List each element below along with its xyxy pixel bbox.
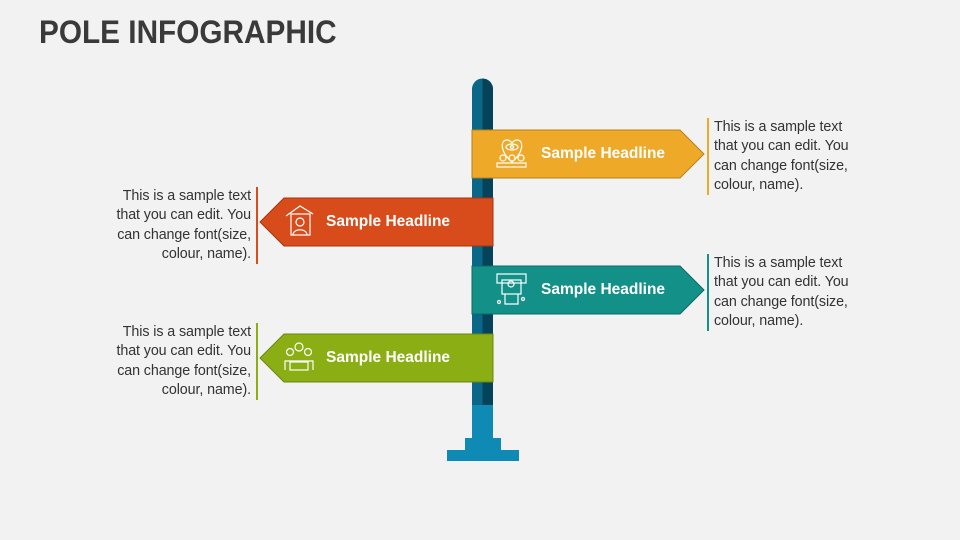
text: green: colour, name). — [162, 382, 251, 398]
title: POLE INFOGRAPHIC — [39, 14, 337, 50]
text: orange: that you can edit. You — [714, 138, 849, 154]
text: red: This is a sample text — [123, 188, 251, 204]
text: orange — [707, 118, 849, 195]
text: red: that you can edit. You — [116, 207, 251, 223]
sign: red: Sample Headline — [326, 213, 450, 230]
text: red: can change font(size, — [117, 227, 251, 243]
text: green — [116, 323, 258, 400]
text: red: colour, name). — [162, 246, 251, 262]
text: teal: This is a sample text — [714, 255, 842, 271]
text: orange: This is a sample text — [714, 119, 842, 135]
text: green: that you can edit. You — [116, 343, 251, 359]
sign: teal: Sample Headline — [541, 281, 665, 298]
text: teal: that you can edit. You — [714, 274, 849, 290]
sign: green: Sample Headline — [326, 349, 450, 366]
text: orange: can change font(size, — [714, 158, 848, 174]
text: orange: colour, name). — [714, 177, 803, 193]
text: red — [116, 187, 258, 264]
text: teal — [707, 254, 849, 331]
text: teal: can change font(size, — [714, 294, 848, 310]
text: green: can change font(size, — [117, 363, 251, 379]
text: green: This is a sample text — [123, 324, 251, 340]
text: teal: colour, name). — [714, 313, 803, 329]
sign: orange: Sample Headline — [541, 145, 665, 162]
